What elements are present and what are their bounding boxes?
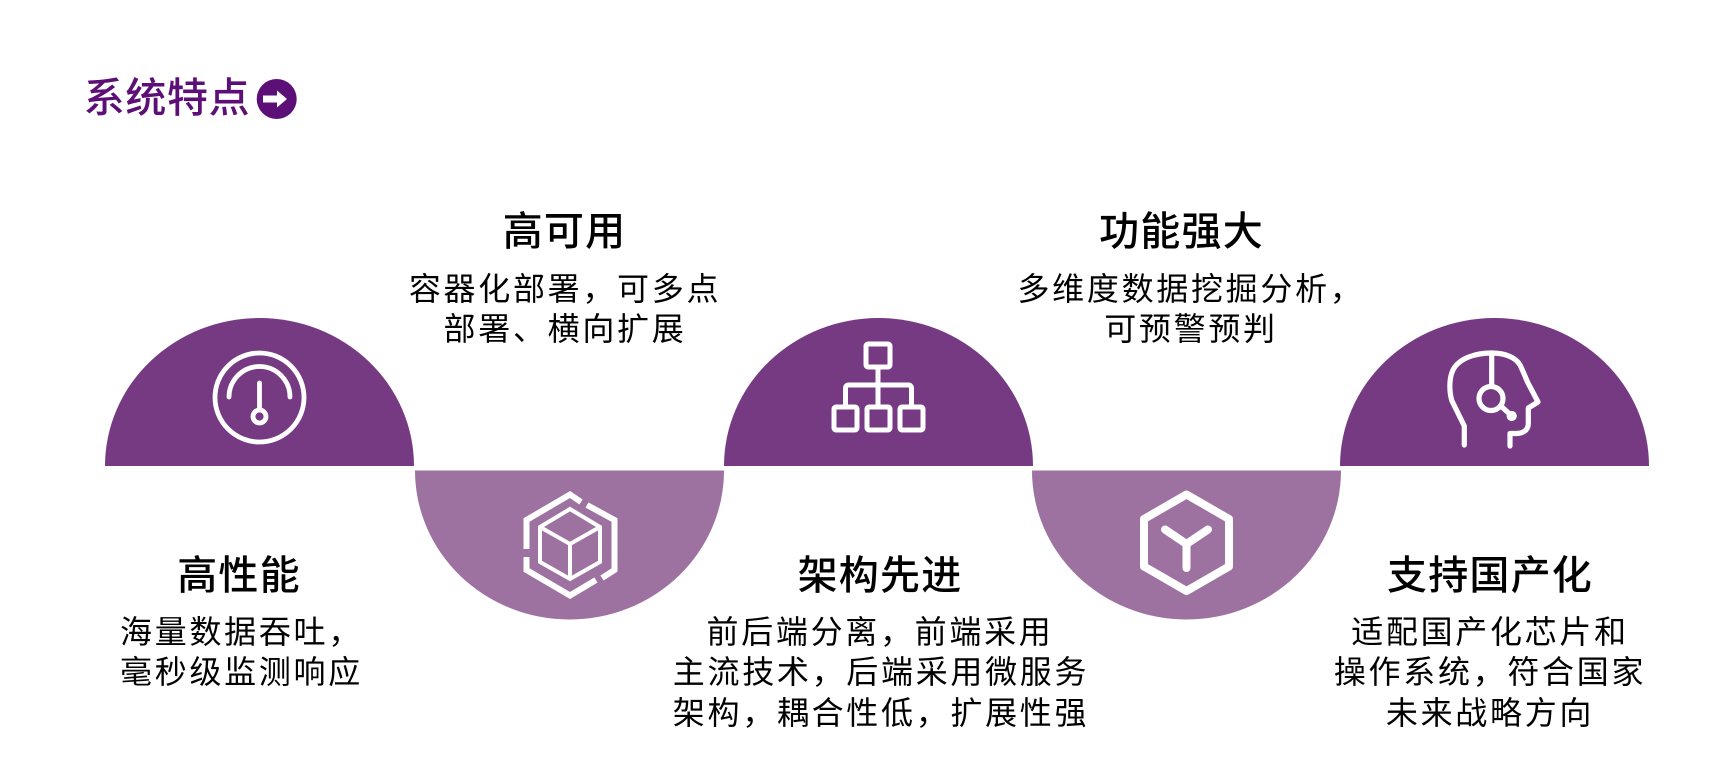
icon: head with headset [1450,353,1538,446]
semicircle [1340,318,1649,466]
heading: 高可用 [503,210,626,254]
description [409,271,721,347]
panel: high performance [105,318,414,690]
icon: gauge [215,353,304,442]
description: 适配国产化芯片和 [1351,614,1629,650]
description: 未来战略方向 [1386,695,1594,731]
heading: 功能强大 [1099,210,1264,254]
description [1017,271,1365,347]
panel: high availability [409,210,724,620]
description [120,614,363,690]
description: 毫秒级监测响应 [120,654,363,690]
description: 容器化部署，可多点 [409,271,721,307]
semicircle [105,318,414,466]
description: 可预警预判 [1104,311,1278,347]
icon: cube [526,494,614,596]
description [673,614,1089,731]
semicircle [724,318,1033,466]
description: 部署、横向扩展 [444,311,686,347]
heading: 高性能 [177,554,301,598]
panel: localization support [1334,318,1649,731]
icon: hexagon with Y [1144,494,1229,591]
description: 操作系统，符合国家 [1334,654,1646,690]
icon: org chart [834,344,923,430]
description [1334,614,1646,731]
heading: 架构先进 [798,554,962,598]
panel: advanced architecture [673,318,1089,731]
description: 前后端分离，前端采用 [706,614,1054,650]
semicircle [1032,470,1341,620]
heading: 支持国产化 [1387,554,1593,598]
description: 主流技术，后端采用微服务 [673,654,1089,690]
panel: powerful features [1017,210,1365,620]
description: 多维度数据挖掘分析， [1017,271,1365,307]
description: 海量数据吞吐， [120,614,363,650]
icon: arrow in circle [257,79,297,119]
description: 架构，耦合性低，扩展性强 [673,695,1089,731]
title: 系统特点 [84,75,250,121]
semicircle [415,470,724,620]
